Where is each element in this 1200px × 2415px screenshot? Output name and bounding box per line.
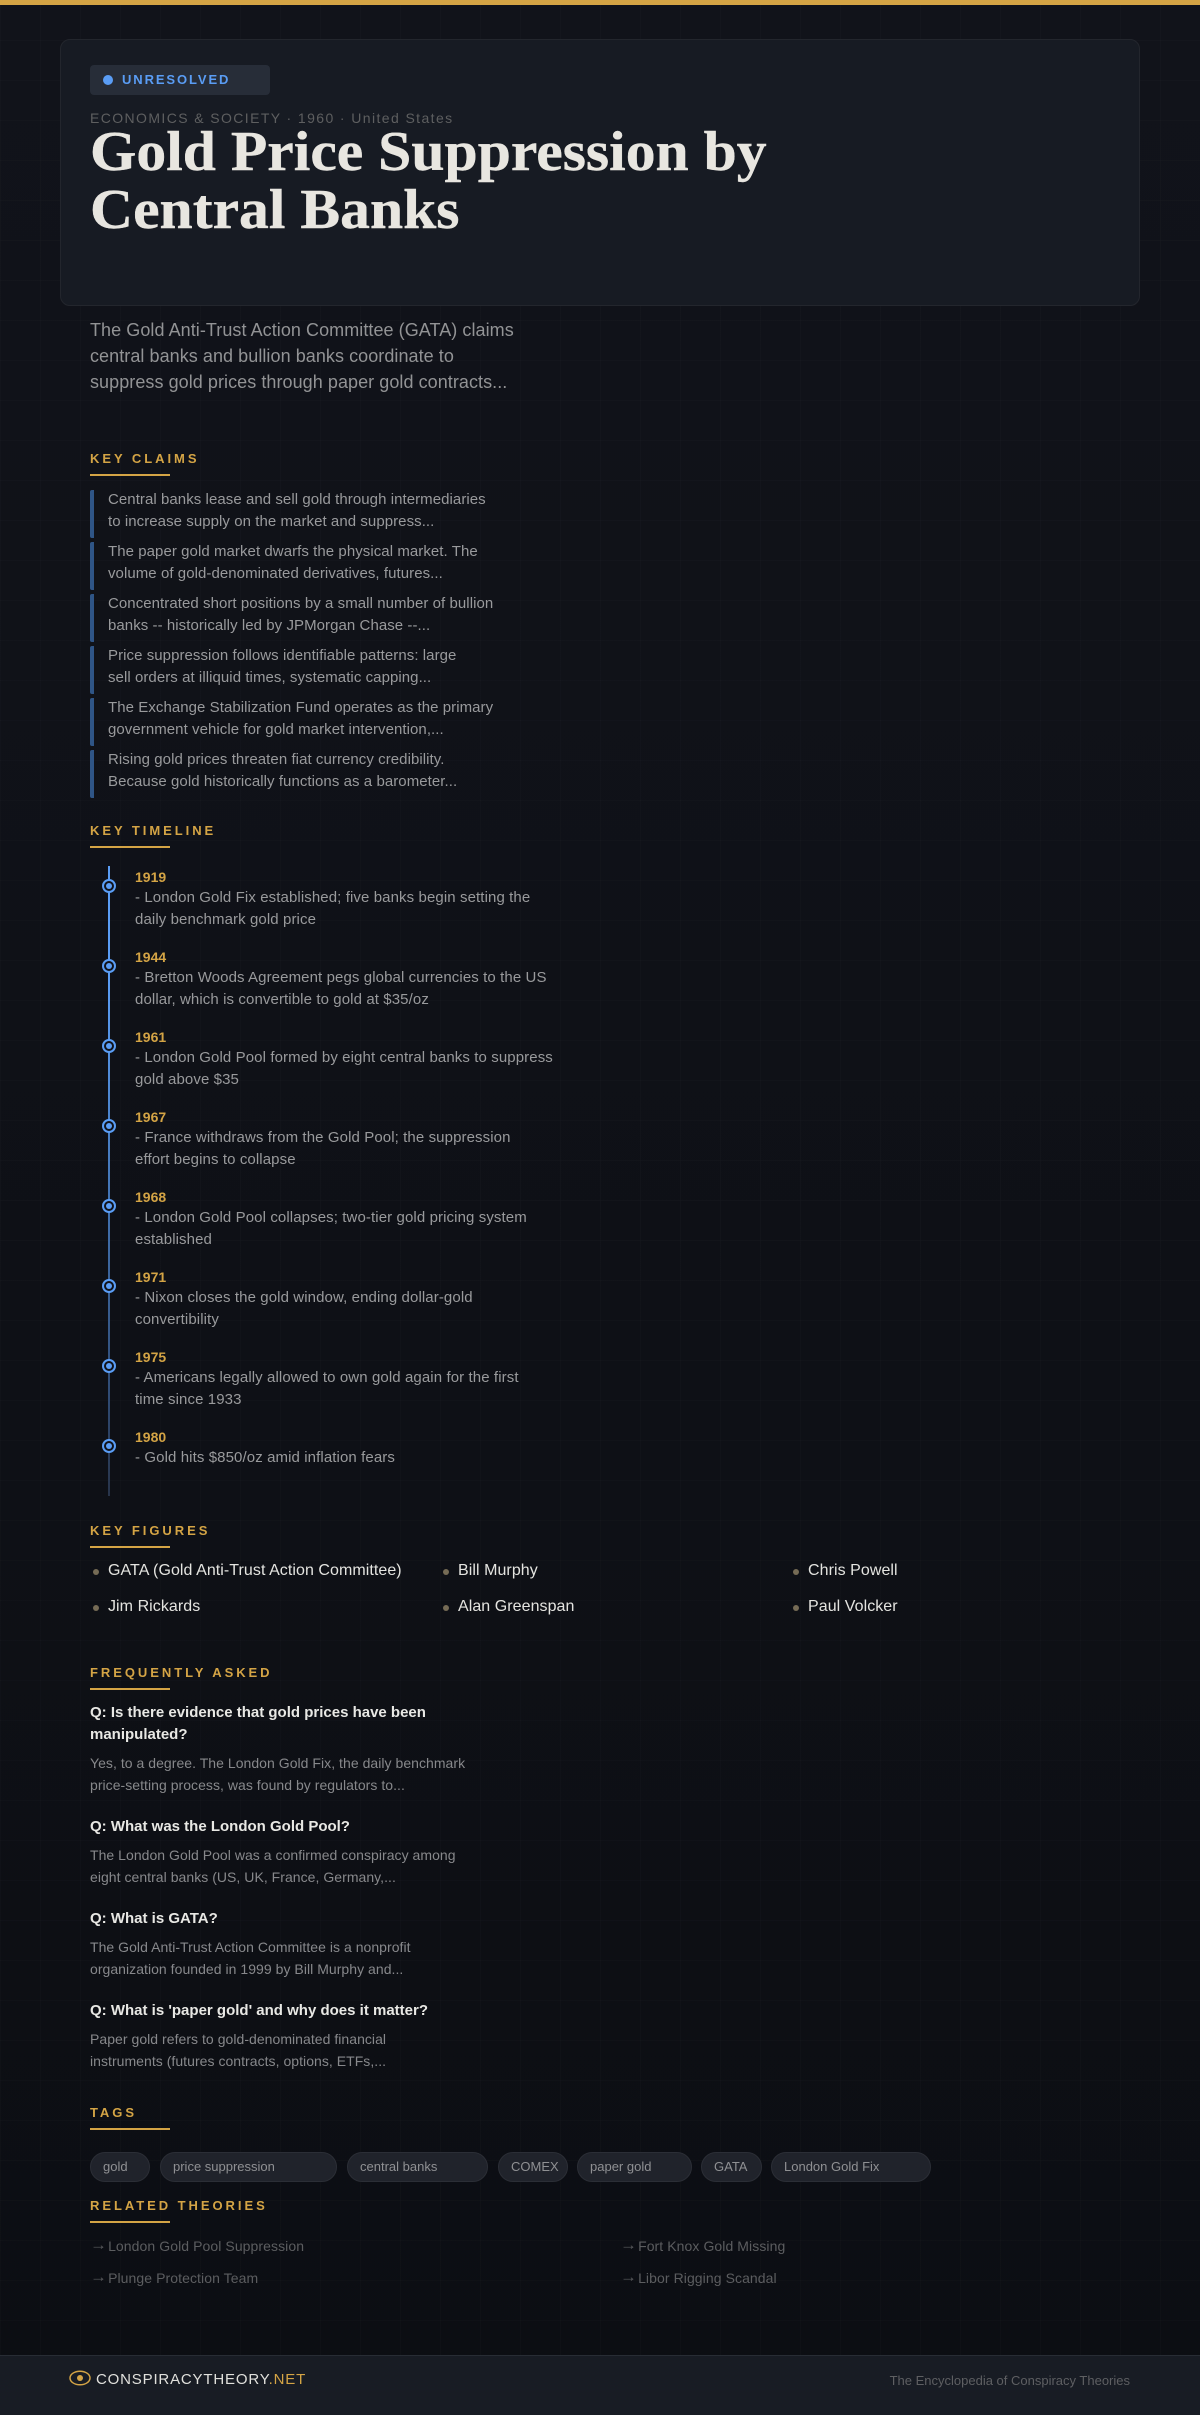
tag: price suppression: price suppression [173, 2159, 275, 2174]
figure: Chris Powell: Chris Powell [808, 1562, 898, 1579]
claim 5 [90, 698, 510, 746]
panel: hero header [60, 39, 1140, 306]
category and date line: ECONOMICS & SOCIETY · 1960 · United States [90, 110, 454, 126]
tag: paper gold [577, 2152, 692, 2182]
claim 5: The Exchange Stabilization Fund operates as the primary [108, 699, 493, 716]
tag: GATA [701, 2152, 762, 2182]
event 1944: - Bretton Woods Agreement pegs global currencies to the US [135, 969, 547, 986]
event 1919: 1919 [135, 869, 166, 885]
event 1961: 1961 [135, 1029, 166, 1045]
timeline spine [108, 866, 110, 1496]
panel: key figures [93, 1562, 898, 1615]
heading: key figures: KEY FIGURES [90, 1523, 210, 1538]
question 4: Q: What is 'paper gold' and why does it matter? [90, 2002, 428, 2019]
summary text [90, 320, 514, 392]
marker 1975 [102, 1359, 116, 1373]
event 1961: - London Gold Pool formed by eight central banks to suppress [135, 1049, 553, 1066]
top accent bar [0, 0, 1200, 5]
question 1: Q: Is there evidence that gold prices have been [90, 1704, 426, 1721]
claim 1 [90, 490, 510, 538]
claim 6: Rising gold prices threaten fiat currency credibility. [108, 751, 444, 768]
event 1968: 1968 [135, 1189, 166, 1205]
claim 4: sell orders at illiquid times, systematic capping... [108, 669, 431, 686]
event 1980: - Gold hits $850/oz amid inflation fears [135, 1449, 395, 1466]
answer 2: The London Gold Pool was a confirmed conspiracy among [90, 1847, 456, 1863]
event 1967 [135, 1109, 511, 1168]
answer 4: instruments (futures contracts, options, ETFs,... [90, 2053, 386, 2069]
footer logo text: CONSPIRACYTHEORY.NET [96, 2371, 306, 2388]
related: Fort Knox Gold Missing: Fort Knox Gold Missing [638, 2238, 785, 2254]
heading: related theories: RELATED THEORIES [90, 2198, 268, 2213]
answer 3 [90, 1939, 411, 1977]
marker 1961 [102, 1039, 116, 1053]
event 1961 [135, 1029, 553, 1088]
event 1980 [135, 1429, 395, 1466]
claim 4: Price suppression follows identifiable patterns: large [108, 647, 456, 664]
answer 3: The Gold Anti-Trust Action Committee is a nonprofit [90, 1939, 411, 1955]
footer tagline: The Encyclopedia of Conspiracy Theories [890, 2373, 1130, 2388]
event 1944: dollar, which is convertible to gold at $35/oz [135, 991, 429, 1008]
tag: gold [90, 2152, 150, 2182]
event 1971: - Nixon closes the gold window, ending dollar-gold [135, 1289, 473, 1306]
tag: gold: gold [103, 2159, 128, 2174]
title [90, 121, 767, 241]
tag: GATA: GATA [714, 2159, 747, 2174]
footer [0, 2355, 1200, 2415]
claim 5: government vehicle for gold market intervention,... [108, 721, 444, 738]
related: London Gold Pool Suppression: London Gold Pool Suppression [108, 2238, 304, 2254]
icon: eye logo [69, 2370, 91, 2386]
heading: tags: TAGS [90, 2105, 137, 2120]
heading: frequently asked: FREQUENTLY ASKED [90, 1665, 273, 1680]
event 1944 [135, 949, 547, 1008]
figure: Paul Volcker: Paul Volcker [808, 1598, 898, 1615]
answer 2: eight central banks (US, UK, France, Germany,... [90, 1869, 396, 1885]
title: Central Banks [90, 179, 459, 241]
summary text: central banks and bullion banks coordinate to [90, 346, 454, 366]
answer 1: Yes, to a degree. The London Gold Fix, the daily benchmark [90, 1755, 465, 1771]
event 1968: established [135, 1231, 212, 1248]
event 1968 [135, 1189, 527, 1248]
event 1967: 1967 [135, 1109, 166, 1125]
tag: central banks [347, 2152, 488, 2182]
question 1: manipulated? [90, 1726, 188, 1743]
question 3: Q: What is GATA? [90, 1910, 218, 1927]
summary text: suppress gold prices through paper gold contracts... [90, 372, 507, 392]
marker 1967 [102, 1119, 116, 1133]
figure: Bill Murphy: Bill Murphy [458, 1562, 538, 1579]
panel: key claims list [90, 490, 493, 798]
answer 1: price-setting process, was found by regulators to... [90, 1777, 405, 1793]
marker 1971 [102, 1279, 116, 1293]
marker 1968 [102, 1199, 116, 1213]
heading: key claims: KEY CLAIMS [90, 451, 199, 466]
related: London Gold Pool Suppression: → [90, 2236, 107, 2252]
claim 4 [90, 646, 510, 694]
tag: price suppression [160, 2152, 337, 2182]
tag: central banks: central banks [360, 2159, 437, 2174]
claim 3: banks -- historically led by JPMorgan Chase --... [108, 617, 430, 634]
marker 1919 [102, 879, 116, 893]
event 1971 [135, 1269, 473, 1328]
event 1975: time since 1933 [135, 1391, 242, 1408]
tag: COMEX [498, 2152, 568, 2182]
related: Libor Rigging Scandal: Libor Rigging Scandal [638, 2270, 777, 2286]
claim 1: Central banks lease and sell gold through intermediaries [108, 491, 486, 508]
event 1919: daily benchmark gold price [135, 911, 316, 928]
event 1975: - Americans legally allowed to own gold again for the first [135, 1369, 519, 1386]
icon: status dot [103, 75, 113, 85]
related: Libor Rigging Scandal: → [620, 2268, 637, 2284]
claim 2: volume of gold-denominated derivatives, futures... [108, 565, 443, 582]
timeline [102, 866, 553, 1496]
panel: related theories [90, 2236, 785, 2286]
event 1919: - London Gold Fix established; five banks begin setting the [135, 889, 530, 906]
event 1968: - London Gold Pool collapses; two-tier gold pricing system [135, 1209, 527, 1226]
answer 2 [90, 1847, 456, 1885]
related: Plunge Protection Team: → [90, 2268, 107, 2284]
heading: key timeline: KEY TIMELINE [90, 823, 216, 838]
related: Plunge Protection Team: Plunge Protection Team [108, 2270, 258, 2286]
question 2: Q: What was the London Gold Pool? [90, 1818, 350, 1835]
event 1980: 1980 [135, 1429, 166, 1445]
event 1971: convertibility [135, 1311, 219, 1328]
tag: London Gold Fix: London Gold Fix [784, 2159, 879, 2174]
event 1967: - France withdraws from the Gold Pool; the suppression [135, 1129, 511, 1146]
answer 4 [90, 2031, 386, 2069]
tag: London Gold Fix [771, 2152, 931, 2182]
event 1975: 1975 [135, 1349, 166, 1365]
claim 6: Because gold historically functions as a barometer... [108, 773, 457, 790]
question 1 [90, 1704, 426, 1743]
marker 1980 [102, 1439, 116, 1453]
event 1967: effort begins to collapse [135, 1151, 296, 1168]
tag: COMEX: COMEX [511, 2159, 559, 2174]
claim 3: Concentrated short positions by a small number of bullion [108, 595, 493, 612]
tag: paper gold: paper gold [590, 2159, 651, 2174]
figure: GATA: GATA (Gold Anti-Trust Action Committee) [108, 1562, 402, 1579]
claim 6 [90, 750, 510, 798]
panel: FAQ [90, 1704, 465, 2069]
answer 1 [90, 1755, 465, 1793]
related: Fort Knox Gold Missing: → [620, 2236, 637, 2252]
event 1961: gold above $35 [135, 1071, 239, 1088]
event 1975 [135, 1349, 519, 1408]
figure: Alan Greenspan: Alan Greenspan [458, 1598, 574, 1615]
event 1971: 1971 [135, 1269, 166, 1285]
claim 2: The paper gold market dwarfs the physical market. The [108, 543, 478, 560]
badge text: UNRESOLVED [122, 72, 230, 87]
marker 1944 [102, 959, 116, 973]
claim 3 [90, 594, 510, 642]
status badge: unresolved [90, 65, 270, 95]
answer 4: Paper gold refers to gold-denominated financial [90, 2031, 386, 2047]
figure: Jim Rickards: Jim Rickards [108, 1598, 200, 1615]
claim 1: to increase supply on the market and suppress... [108, 513, 434, 530]
event 1919 [135, 869, 530, 928]
summary text: The Gold Anti-Trust Action Committee (GATA) claims [90, 320, 514, 340]
title: Gold Price Suppression by [90, 121, 767, 183]
answer 3: organization founded in 1999 by Bill Murphy and... [90, 1961, 403, 1977]
event 1944: 1944 [135, 949, 166, 965]
claim 2 [90, 542, 510, 590]
